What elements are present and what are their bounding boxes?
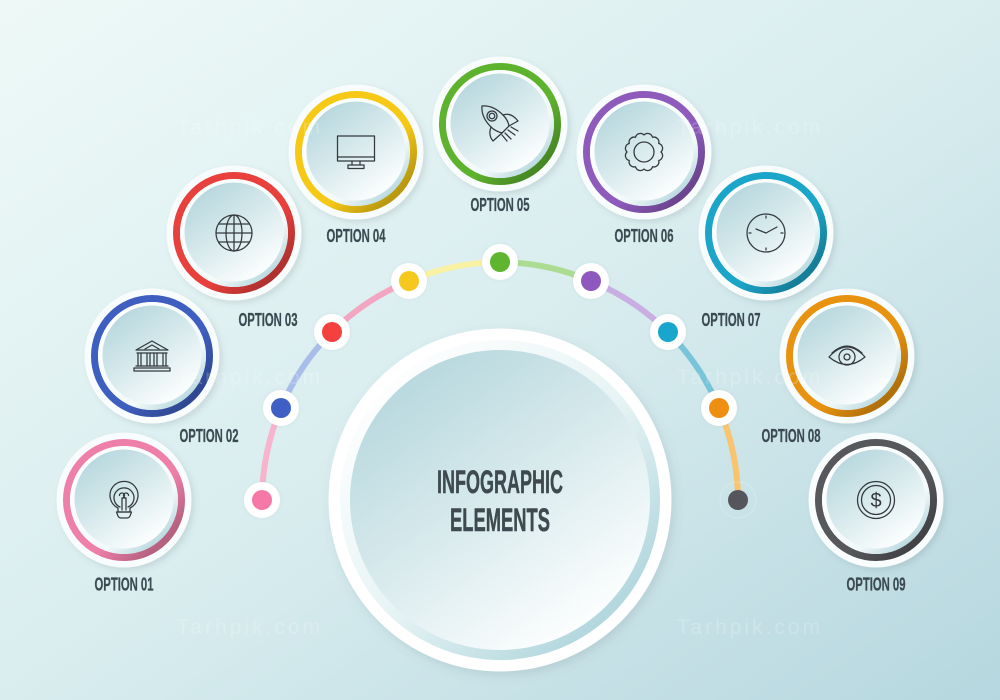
heading: ELEMENTS	[450, 502, 550, 538]
option 09	[808, 432, 944, 594]
label: OPTION 05	[470, 195, 530, 215]
option 04	[288, 84, 424, 246]
icon: rocket	[482, 106, 518, 141]
option 06	[576, 84, 712, 246]
option 03	[166, 166, 302, 330]
timeline dots	[244, 244, 756, 518]
icon: dollar coin	[858, 482, 894, 518]
icon: dollar coin: $	[870, 490, 882, 512]
label: OPTION 07	[702, 310, 760, 330]
label: OPTION 02	[180, 426, 238, 446]
option 08	[762, 288, 914, 446]
option 01	[56, 432, 192, 594]
label: OPTION 09	[846, 574, 906, 594]
heading: INFOGRAPHIC	[437, 464, 563, 500]
icon: clock	[747, 214, 785, 252]
watermarks	[177, 116, 823, 639]
option 02	[84, 288, 238, 446]
option 07	[698, 166, 834, 330]
icon: eye	[829, 346, 865, 365]
label: OPTION 04	[326, 226, 386, 246]
watermarks: Tarhpik.com	[677, 116, 823, 139]
timeline arc	[262, 262, 738, 500]
central circle	[328, 328, 672, 672]
watermarks: Tarhpik.com	[177, 616, 323, 639]
watermarks: Tarhpik.com	[177, 116, 323, 139]
label: OPTION 03	[238, 310, 298, 330]
icon: bank	[134, 341, 170, 371]
label: OPTION 08	[762, 426, 820, 446]
icon: globe	[216, 215, 252, 251]
heading	[437, 464, 563, 538]
icon: light bulb	[110, 481, 138, 518]
option 05	[432, 56, 568, 215]
watermarks: Tarhpik.com	[677, 616, 823, 639]
icon: monitor	[338, 136, 374, 168]
watermarks: Tarhpik.com	[177, 366, 323, 389]
label: OPTION 01	[94, 574, 154, 594]
label: OPTION 06	[614, 226, 674, 246]
watermarks: Tarhpik.com	[677, 366, 823, 389]
icon: gear	[625, 133, 663, 171]
